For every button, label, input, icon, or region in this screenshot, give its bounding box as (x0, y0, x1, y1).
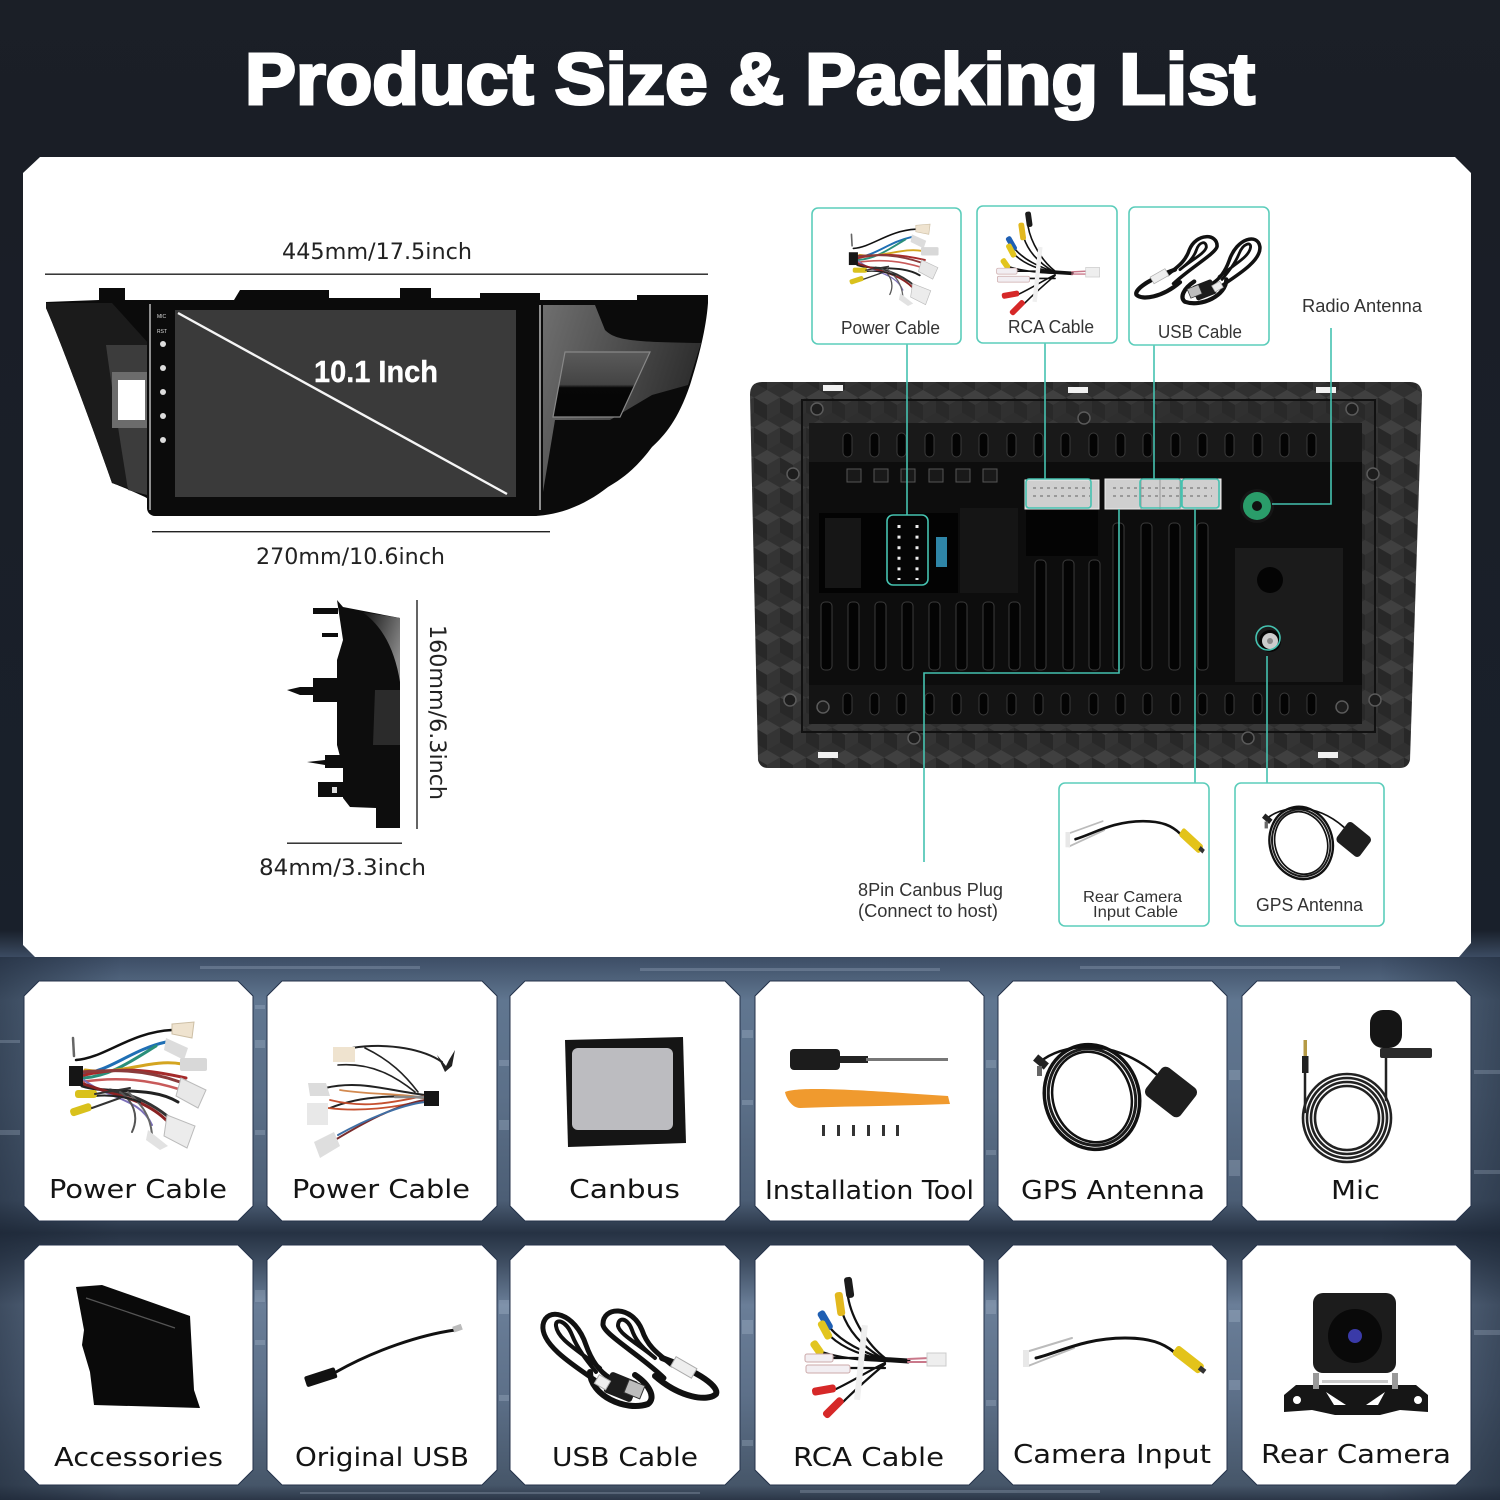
card: GPS antenna (998, 981, 1227, 1221)
callout: rear camera input cable: Input Cable (1093, 904, 1178, 921)
callout: USB cable: USB Cable (1158, 322, 1242, 342)
label: 8pin canbus plug (858, 880, 1003, 921)
callout: USB cable (1129, 207, 1269, 345)
card: power cable 1: Power Cable (49, 1175, 227, 1205)
head unit front view: RST (157, 329, 167, 335)
card: power cable 2 (267, 981, 497, 1221)
card: USB cable (510, 1245, 740, 1485)
card: RCA cable (755, 1245, 984, 1485)
card: mic: Mic (1331, 1176, 1380, 1206)
card: original USB (267, 1245, 497, 1485)
card: power cable 1 (24, 981, 253, 1221)
label: radio antenna: Radio Antenna (1302, 296, 1423, 316)
card: canbus: Canbus (569, 1175, 680, 1205)
card: canbus (510, 981, 740, 1221)
head unit front view (46, 288, 708, 516)
connector lines (887, 328, 1331, 862)
panel: product size and connections (23, 157, 1471, 957)
card: camera input (998, 1245, 1227, 1485)
card: accessories (24, 1245, 253, 1485)
card: mic (1242, 981, 1471, 1221)
callout: power cable: Power Cable (841, 318, 940, 338)
card: installation tool: Installation Tool (765, 1176, 974, 1206)
card: USB cable: USB Cable (552, 1443, 698, 1473)
label: 8pin canbus plug: 8Pin Canbus Plug (858, 880, 1003, 900)
callout: rear camera input cable: Rear Camera (1083, 889, 1182, 906)
card: GPS antenna: GPS Antenna (1021, 1176, 1205, 1206)
card: rear camera: Rear Camera (1261, 1440, 1451, 1470)
title: Product Size & Packing List (245, 40, 1255, 120)
head unit rear view (750, 382, 1422, 768)
dimension: 270mm: 270mm/10.6inch (256, 545, 445, 570)
head unit front view: MIC (157, 314, 167, 320)
card: rear camera (1242, 1245, 1471, 1485)
dimension: width 445mm: 445mm/17.5inch (282, 240, 472, 265)
dimension: 160mm: 160mm/6.3inch (424, 625, 449, 800)
callout: GPS antenna: GPS Antenna (1256, 895, 1364, 915)
callout: RCA cable (977, 206, 1117, 343)
dimension: 84mm: 84mm/3.3inch (259, 856, 426, 881)
label: 8pin canbus plug: (Connect to host) (858, 901, 998, 921)
head unit front view: 10.1 Inch (314, 354, 438, 389)
callout: power cable (812, 208, 961, 344)
card: RCA cable: RCA Cable (793, 1443, 944, 1473)
card: accessories: Accessories (54, 1443, 223, 1473)
card: installation tool (755, 981, 984, 1221)
callout: GPS antenna (1235, 783, 1384, 926)
callout: RCA cable: RCA Cable (1008, 317, 1094, 337)
head unit side view (287, 600, 400, 828)
callout: rear camera input cable (1059, 783, 1209, 926)
card: original USB: Original USB (295, 1443, 469, 1473)
card: camera input: Camera Input (1013, 1440, 1211, 1470)
card: power cable 2: Power Cable (292, 1175, 470, 1205)
